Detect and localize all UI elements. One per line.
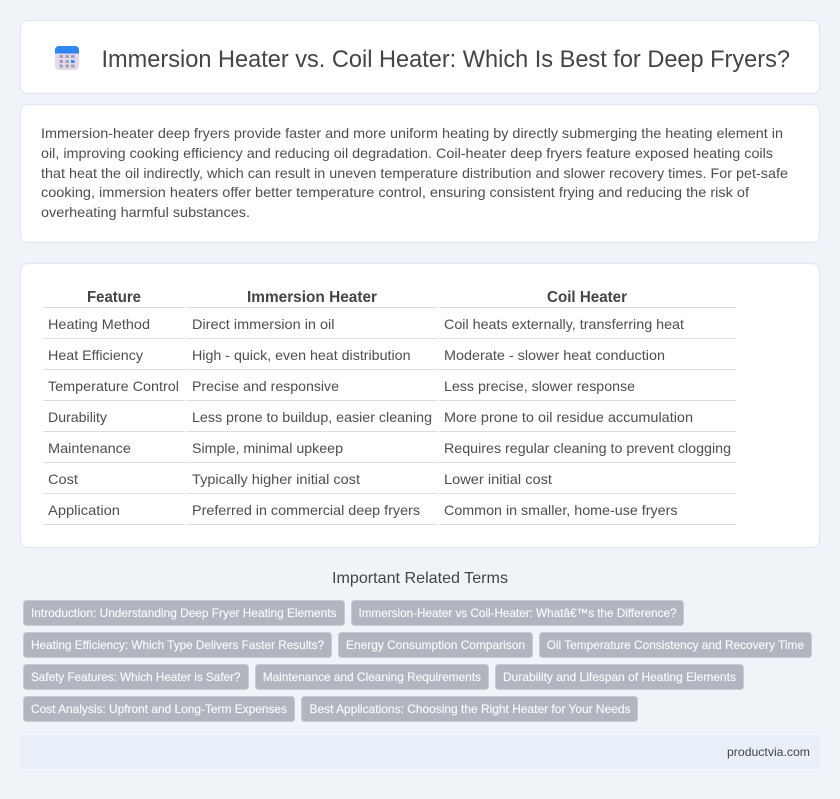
footer source text: productvia.com	[727, 745, 810, 759]
chip: maintenance: Maintenance and Cleaning Requirements	[263, 670, 481, 684]
text block: summary: that heat the oil indirectly, which can result in uneven temperature distribution and slower recovery times. For pet-safe	[41, 165, 788, 181]
chip: heating efficiency	[24, 632, 332, 658]
chip: introduction: Introduction: Understanding Deep Fryer Heating Elements	[31, 606, 336, 620]
row: temperature control: Temperature Control	[48, 378, 179, 394]
row: heating method: Direct immersion in oil	[192, 316, 334, 332]
chip: energy consumption	[338, 632, 532, 658]
table header: Feature	[87, 289, 141, 306]
row: maintenance: Simple, minimal upkeep	[192, 440, 343, 456]
row: temperature control	[48, 378, 635, 394]
heading: important related terms: Important Related Terms	[332, 570, 508, 587]
text block: summary	[41, 125, 788, 220]
chip: energy consumption: Energy Consumption Comparison	[346, 638, 525, 652]
chip: introduction	[24, 600, 344, 626]
row: heat efficiency: Moderate - slower heat conduction	[444, 347, 665, 363]
chip: heating efficiency: Heating Efficiency: Which Type Delivers Faster Results?	[31, 638, 324, 652]
chip: difference: Immersion-Heater vs Coil-Heater: Whatâ€™s the Difference?	[358, 606, 677, 620]
footer	[20, 735, 820, 769]
chip: oil temperature: Oil Temperature Consistency and Recovery Time	[547, 638, 804, 652]
row: application: Common in smaller, home-use fryers	[444, 502, 678, 518]
chip: durability: Durability and Lifespan of Heating Elements	[503, 670, 736, 684]
row: maintenance: Requires regular cleaning to prevent clogging	[444, 440, 731, 456]
row: cost: Cost	[48, 471, 78, 487]
chip: safety: Safety Features: Which Heater is Safer?	[31, 670, 241, 684]
chip: safety	[24, 664, 248, 690]
chip: maintenance	[256, 664, 488, 690]
row: cost	[48, 471, 552, 487]
row: heat efficiency: Heat Efficiency	[48, 347, 143, 363]
row: cost: Typically higher initial cost	[192, 471, 360, 487]
row: heating method: Coil heats externally, transferring heat	[444, 316, 684, 332]
row: heating method	[48, 316, 684, 332]
chip: oil temperature	[540, 632, 812, 658]
row: maintenance: Maintenance	[48, 440, 131, 456]
icon: calendar	[55, 46, 79, 70]
row: heat efficiency	[48, 347, 665, 363]
table header: Coil Heater	[547, 289, 627, 306]
related term chips	[24, 600, 812, 722]
chip: best applications	[302, 696, 638, 722]
row: maintenance	[48, 440, 731, 456]
table header: Immersion Heater	[247, 289, 377, 306]
text block: summary: overheating harmful substances.	[41, 204, 250, 220]
row: durability	[48, 409, 693, 425]
row: temperature control: Precise and responsive	[192, 378, 339, 394]
row: application: Preferred in commercial deep fryers	[192, 502, 420, 518]
row: durability: Durability	[48, 409, 107, 425]
title: Immersion Heater vs. Coil Heater: Which Is Best for Deep Fryers?	[102, 46, 790, 73]
row: durability: More prone to oil residue accumulation	[444, 409, 693, 425]
row: durability: Less prone to buildup, easier cleaning	[192, 409, 432, 425]
row: application: Application	[48, 502, 120, 518]
panel: comparison table	[20, 264, 820, 548]
table rules	[43, 308, 736, 524]
text block: summary: cooking, immersion heaters offer better temperature control, ensuring consistent frying and reducing the risk of	[41, 184, 749, 200]
text block: summary: oil, improving cooking efficiency and reducing oil degradation. Coil-heater deep fryers feature exposed heating coils	[41, 145, 773, 161]
row: heat efficiency: High - quick, even heat distribution	[192, 347, 410, 363]
chip: durability	[496, 664, 744, 690]
table header	[87, 289, 627, 306]
chip: best applications: Best Applications: Choosing the Right Heater for Your Needs	[310, 702, 630, 716]
row: application	[48, 502, 678, 518]
row: heating method: Heating Method	[48, 316, 150, 332]
row: cost: Lower initial cost	[444, 471, 552, 487]
chip: difference	[352, 600, 684, 626]
text block: summary: Immersion-heater deep fryers provide faster and more uniform heating by directly submerging the heating element in	[41, 125, 783, 141]
header panel	[20, 20, 820, 94]
chip: cost analysis	[24, 696, 294, 722]
chip: cost analysis: Cost Analysis: Upfront and Long-Term Expenses	[31, 702, 287, 716]
panel: summary paragraph	[20, 104, 820, 242]
row: temperature control: Less precise, slower response	[444, 378, 635, 394]
